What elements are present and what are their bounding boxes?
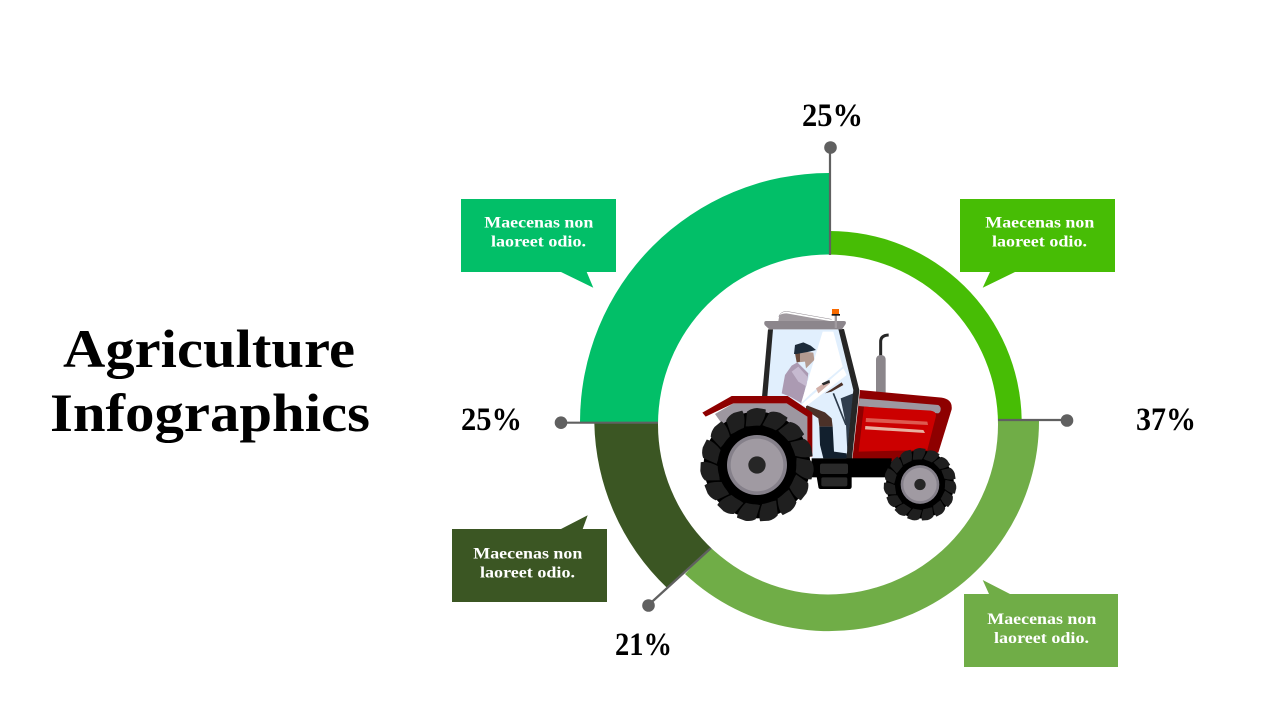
sleeve [792, 367, 807, 387]
steering wheel and arm [816, 380, 846, 425]
hair [795, 353, 800, 362]
callout: bottom right: Maecenas non [987, 611, 1097, 628]
inner white circle [658, 254, 998, 594]
boot [819, 427, 847, 458]
beacon light [832, 309, 840, 328]
exhaust pipe [876, 335, 889, 393]
rear fender [702, 396, 812, 457]
cab roof [764, 311, 846, 329]
chassis [812, 458, 892, 489]
callout: bottom left: laoreet odio. [480, 564, 575, 581]
donut chart [580, 173, 1039, 631]
segment: 25% emerald [580, 173, 829, 422]
cap [794, 342, 816, 354]
torso [782, 362, 808, 403]
segment: 25% bright green [829, 231, 1022, 420]
callout: top left: Maecenas non [484, 214, 594, 231]
leader: bottom 21% [642, 548, 711, 612]
percentage: left 25%: 25% [461, 402, 522, 438]
icon: red tractor with driver [699, 309, 957, 523]
cab pillars [762, 329, 859, 462]
trousers [806, 405, 833, 427]
leader: right 37% [998, 414, 1073, 427]
callout: bottom right: laoreet odio. [994, 630, 1089, 647]
callout: bottom left: Maecenas non [473, 545, 583, 562]
percentage: top 25%: 25% [802, 98, 863, 134]
percentage: bottom 21%: 21% [615, 627, 672, 663]
callout: top right: laoreet odio. [992, 233, 1087, 250]
driver [782, 342, 847, 458]
dashboard panel [841, 393, 853, 452]
tractor hood [852, 390, 952, 463]
callout: bottom right [964, 580, 1118, 667]
windshield glare [801, 332, 847, 407]
callout: top right: Maecenas non [985, 214, 1095, 231]
callout: top left [461, 199, 616, 288]
rear wheel [699, 408, 815, 523]
front wheel [883, 448, 957, 522]
leader: top 25% [824, 141, 837, 255]
callout: bottom left [452, 515, 607, 602]
percentage: right 37%: 37% [1136, 402, 1196, 438]
callout: top left: laoreet odio. [491, 233, 586, 250]
face and neck [796, 352, 814, 368]
title: Infographics [50, 383, 370, 443]
title: Agriculture [63, 319, 355, 379]
cab glass [765, 329, 857, 459]
title [50, 319, 370, 443]
leader: left 25% [555, 416, 658, 429]
callout: top right [960, 199, 1115, 288]
segment: 37% light green [685, 420, 1039, 631]
segment: 21% dark green [594, 422, 800, 588]
